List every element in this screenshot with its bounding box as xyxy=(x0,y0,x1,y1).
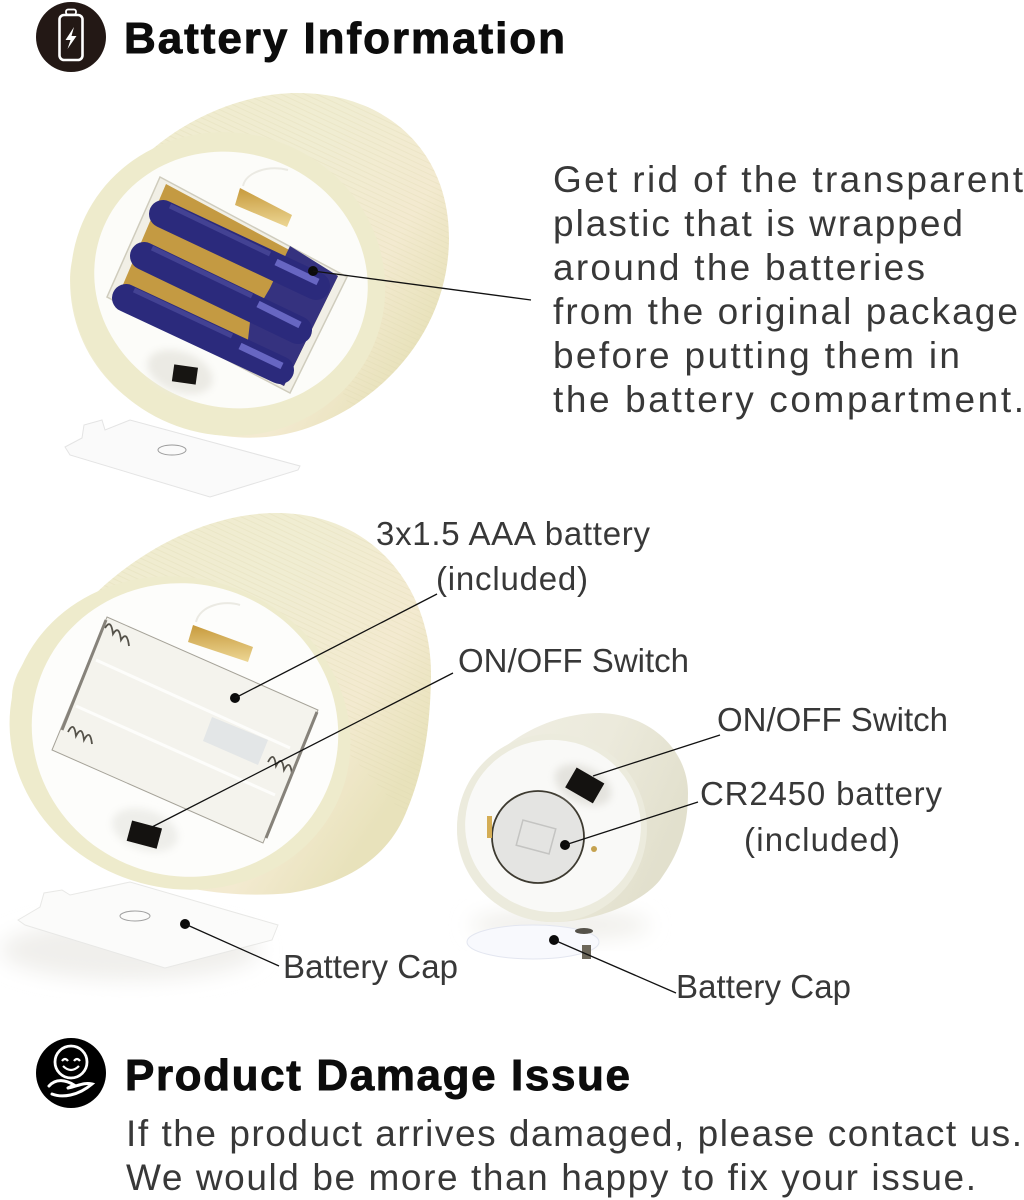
power switch xyxy=(565,767,604,803)
leader: switch, small candle xyxy=(593,735,720,776)
contact pin xyxy=(591,846,597,852)
candle body xyxy=(70,93,449,438)
candle photo: small coin cell xyxy=(436,713,688,943)
battery rods xyxy=(126,214,316,370)
label: coin cell xyxy=(700,775,942,858)
label: switch, large candle: ON/OFF Switch xyxy=(458,642,689,679)
icon: battery badge xyxy=(36,2,106,72)
instruction text: before putting them in xyxy=(553,335,960,376)
compartment ribs xyxy=(76,660,290,795)
instruction text: around the batteries xyxy=(553,247,925,288)
candle body xyxy=(457,713,688,922)
damage support text xyxy=(126,1113,1022,1198)
label: switch, small candle: ON/OFF Switch xyxy=(717,701,948,738)
leader: switch, large candle xyxy=(152,673,453,827)
switch recess xyxy=(106,800,184,860)
white compartment disc xyxy=(0,544,377,916)
battery compartment xyxy=(107,177,347,393)
white battery disc xyxy=(58,113,404,447)
label: coin cell: CR2450 battery xyxy=(700,775,942,812)
cap logo xyxy=(158,445,186,455)
compartment label block xyxy=(203,717,268,765)
label: coin cell: (included) xyxy=(744,821,900,858)
leader: coin cell xyxy=(560,802,698,850)
white disc xyxy=(446,720,660,932)
gold tab xyxy=(188,625,253,662)
instruction text: from the original package xyxy=(553,291,1018,332)
leader: cap, large candle xyxy=(180,919,279,966)
coin mark xyxy=(516,820,556,854)
label: cap, small candle: Battery Cap xyxy=(676,968,851,1005)
leader: AAA battery xyxy=(230,594,437,703)
candle rim xyxy=(0,532,391,934)
battery highlights xyxy=(240,262,318,366)
empty compartment xyxy=(52,617,318,843)
instruction text: Get rid of the transparent xyxy=(553,159,1024,200)
switch recess xyxy=(141,342,219,402)
candle rim xyxy=(28,88,428,480)
candle texture xyxy=(118,93,449,408)
instruction text: the battery compartment. xyxy=(553,379,1024,420)
contact edges xyxy=(62,620,317,838)
floor shadow xyxy=(470,909,650,941)
tab arc xyxy=(196,603,240,622)
battery cap, middle xyxy=(18,882,278,968)
springs xyxy=(68,624,292,774)
candle rim xyxy=(436,713,668,943)
candle texture xyxy=(70,513,431,815)
label: cap, large candle: Battery Cap xyxy=(283,948,458,985)
battery cap, top xyxy=(65,420,300,497)
label: AAA battery: (included) xyxy=(436,560,588,597)
coin cell xyxy=(492,791,584,883)
switch recess xyxy=(548,756,618,814)
damage support text: We would be more than happy to fix your issue. xyxy=(126,1157,976,1198)
heading: Battery Information: Battery Information xyxy=(124,14,565,63)
instruction text xyxy=(553,159,1024,420)
gold tab xyxy=(235,188,292,227)
heading: Product Damage Issue: Product Damage Issue xyxy=(125,1051,630,1100)
soft floor shadow xyxy=(0,920,260,980)
instruction text: plastic that is wrapped xyxy=(553,203,963,244)
leader: cap, small candle xyxy=(549,935,676,993)
label: AAA battery: 3x1.5 AAA battery xyxy=(376,515,650,552)
coin contact xyxy=(487,816,492,838)
label: AAA battery xyxy=(376,515,650,597)
icon: smile over hand xyxy=(36,1038,106,1108)
power switch xyxy=(172,364,198,385)
cap contact xyxy=(575,928,593,934)
small battery cap xyxy=(467,925,599,959)
cap logo xyxy=(120,911,150,921)
cap spring xyxy=(582,945,591,959)
leader: battery pointer xyxy=(308,266,531,300)
tab arc xyxy=(243,168,288,186)
candle photo: empty compartment xyxy=(0,513,431,980)
candle photo: batteries installed xyxy=(28,88,449,480)
damage support text: If the product arrives damaged, please contact us. xyxy=(126,1113,1022,1154)
power switch xyxy=(127,820,162,849)
battery gold shadow xyxy=(245,246,338,386)
battery sheen xyxy=(134,206,270,336)
candle body xyxy=(12,513,431,895)
